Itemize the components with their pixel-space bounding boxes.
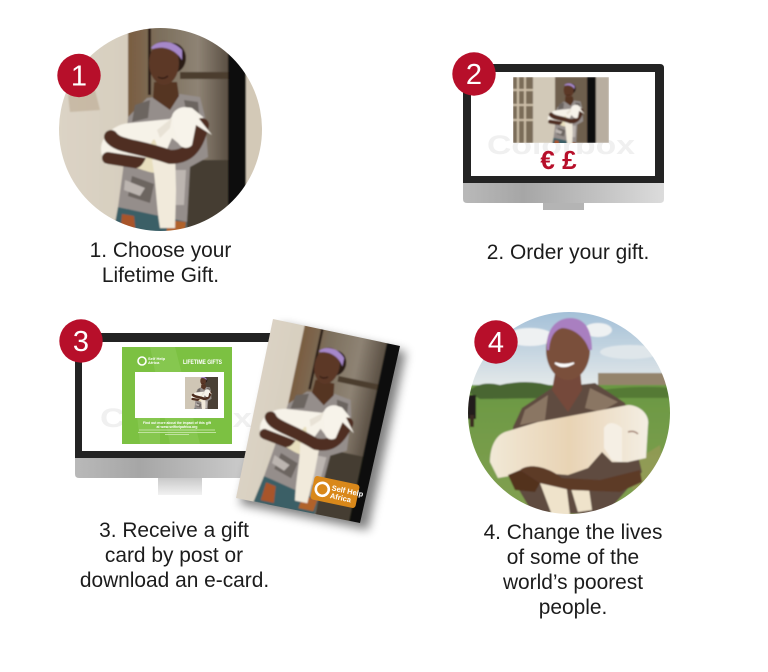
e-card: Africa bbox=[148, 360, 160, 365]
e-card bbox=[122, 347, 232, 444]
caption: step 4: world’s poorest bbox=[502, 571, 643, 594]
panel: step 1 choose your gift bbox=[57, 28, 262, 282]
card thumbnail photo bbox=[185, 377, 218, 409]
e-card: Self Help bbox=[148, 356, 166, 361]
photo: woman holding lamb in doorway bbox=[59, 28, 262, 231]
badge: number 4 bbox=[474, 320, 518, 364]
badge: number 4: 4 bbox=[488, 327, 504, 359]
caption: step 1: 1. Choose your bbox=[90, 239, 231, 262]
caption: step 4: of some of the bbox=[507, 546, 639, 569]
e-card: Find out more about the impact of this gift bbox=[143, 421, 212, 425]
logo: Self Help Africa bbox=[310, 476, 363, 508]
logo: Self Help Africa: Self Help bbox=[331, 483, 365, 499]
panel: step 2 order your gift bbox=[452, 52, 664, 264]
e-card: at www.selfhelpafrica.org bbox=[157, 425, 197, 429]
caption: step 3: download an e-card. bbox=[80, 569, 269, 592]
badge: number 3: 3 bbox=[73, 326, 89, 358]
caption: step 3: card by post or bbox=[105, 544, 243, 567]
caption: step 1: Lifetime Gift. bbox=[102, 264, 219, 287]
badge: number 2 bbox=[452, 52, 496, 96]
badge: number 2: 2 bbox=[466, 59, 482, 91]
photo: smiling woman with lamb in field bbox=[468, 312, 670, 514]
logo: Self Help Africa: Africa bbox=[329, 491, 353, 505]
badge: number 1: 1 bbox=[71, 60, 87, 92]
icon: desktop monitor with e-card bbox=[75, 333, 290, 495]
panel: step 4 change lives bbox=[468, 312, 670, 618]
badge: number 1 bbox=[57, 54, 101, 97]
currency symbols: € £ bbox=[540, 145, 577, 175]
badge: number 3 bbox=[59, 319, 103, 363]
e-card: LIFETIME GIFTS bbox=[183, 360, 222, 366]
watermark: Colorbox bbox=[487, 130, 635, 160]
caption: step 4: 4. Change the lives bbox=[484, 521, 662, 544]
watermark: Colorbox bbox=[100, 403, 252, 433]
screen photo bbox=[513, 77, 609, 149]
gift card: printed photo card bbox=[234, 319, 412, 536]
caption: step 2: 2. Order your gift. bbox=[487, 241, 649, 264]
caption: step 3: 3. Receive a gift bbox=[99, 519, 249, 542]
panel: step 3 receive a gift card bbox=[59, 314, 413, 592]
icon: desktop monitor with photo and currencies bbox=[463, 64, 664, 210]
caption: step 4: people. bbox=[539, 596, 607, 619]
